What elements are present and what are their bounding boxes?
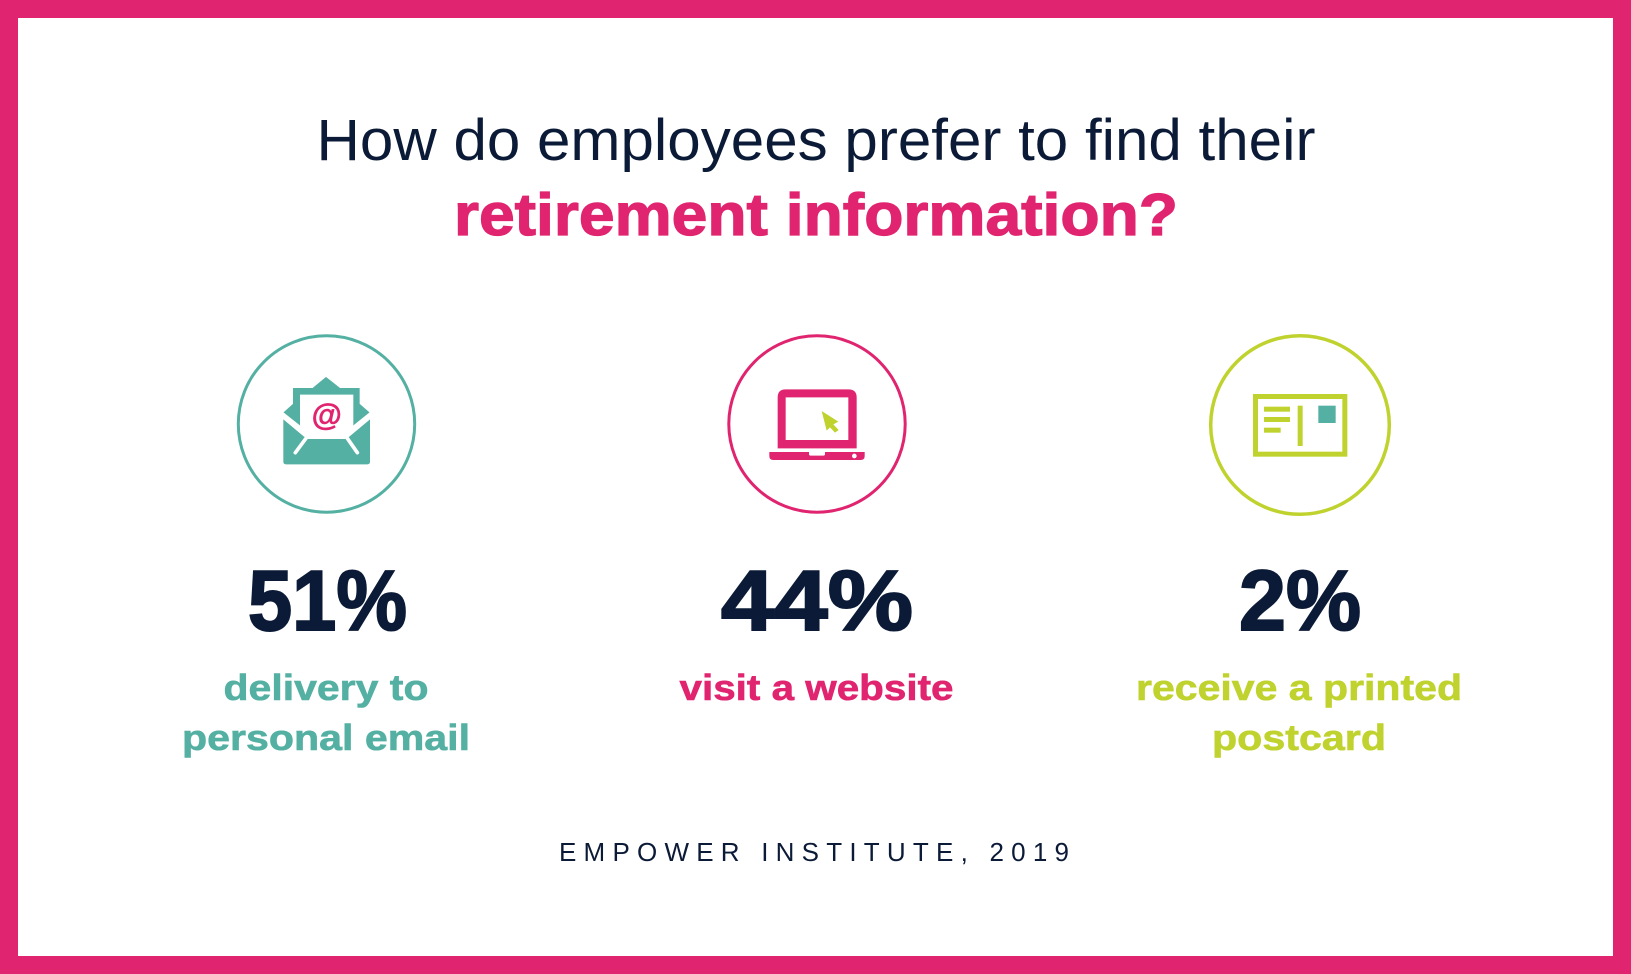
label: delivery to bbox=[224, 667, 428, 708]
panel: postcard bbox=[1136, 336, 1462, 758]
title bbox=[316, 108, 1316, 248]
label bbox=[1136, 667, 1462, 758]
icon: open envelope: @ bbox=[312, 397, 342, 432]
panel: email bbox=[182, 336, 470, 758]
icon: open envelope bbox=[238, 336, 415, 512]
label: postcard bbox=[1212, 717, 1386, 758]
title: How do employees prefer to find their bbox=[316, 108, 1316, 173]
label bbox=[182, 667, 470, 758]
stat: 51% bbox=[248, 554, 407, 649]
label: receive a printed bbox=[1136, 667, 1462, 708]
panel: website bbox=[680, 336, 954, 708]
stat: 44% bbox=[721, 554, 913, 649]
stat: 2% bbox=[1239, 554, 1361, 649]
title: retirement information? bbox=[454, 182, 1178, 248]
label: visit a website bbox=[680, 667, 954, 708]
icon: laptop bbox=[729, 336, 905, 512]
source: EMPOWER INSTITUTE, 2019 bbox=[559, 837, 1069, 867]
icon: postcard bbox=[1211, 336, 1389, 514]
label: personal email bbox=[182, 717, 470, 758]
